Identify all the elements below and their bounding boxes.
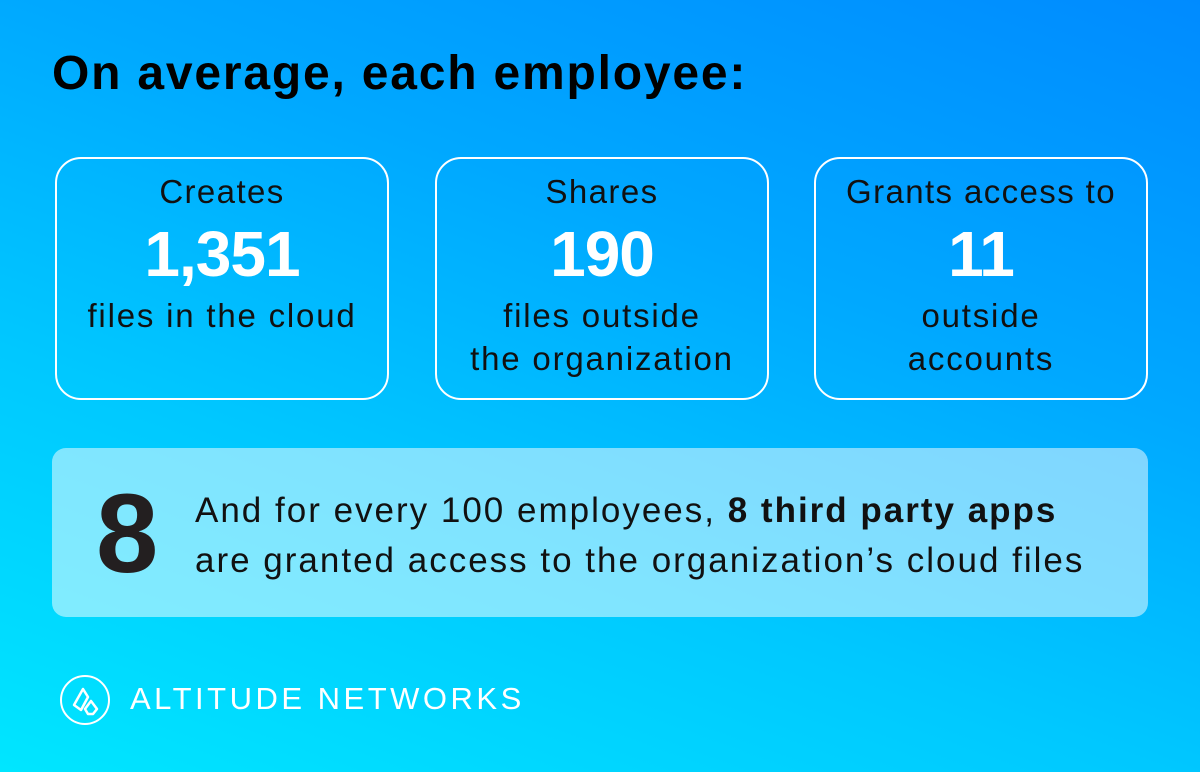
brand name: ALTITUDE NETWORKS (130, 681, 525, 716)
caption: files outside (470, 297, 734, 377)
label: creates: Creates (159, 173, 285, 210)
number: 8: 8 (96, 471, 158, 596)
caption: outside accounts: outside (921, 297, 1040, 334)
caption: outside accounts: accounts (908, 340, 1054, 377)
text: apps statement: And for every 100 employees, 8 third party apps (195, 491, 1057, 530)
logo (60, 675, 525, 725)
caption: files outside: the organization (470, 340, 734, 377)
text: apps statement (195, 491, 1084, 580)
panel: third party apps (52, 448, 1148, 617)
panel: grants access (814, 157, 1148, 400)
label: shares: Shares (546, 173, 658, 210)
text: apps statement: are granted access to the organization’s cloud files (195, 541, 1084, 580)
number: 11: 11 (948, 218, 1014, 290)
label: grants: Grants access to (846, 173, 1116, 210)
caption: outside accounts (908, 297, 1054, 377)
caption: files in cloud: files in the cloud (87, 297, 357, 334)
number: 1,351: 1,351 (144, 218, 300, 290)
title: On average, each employee: (52, 47, 747, 100)
caption: files outside: files outside (503, 297, 701, 334)
panel: shares (435, 157, 769, 400)
number: 190: 190 (550, 218, 654, 290)
icon: logo mark (60, 675, 110, 725)
panel: creates (55, 157, 389, 400)
